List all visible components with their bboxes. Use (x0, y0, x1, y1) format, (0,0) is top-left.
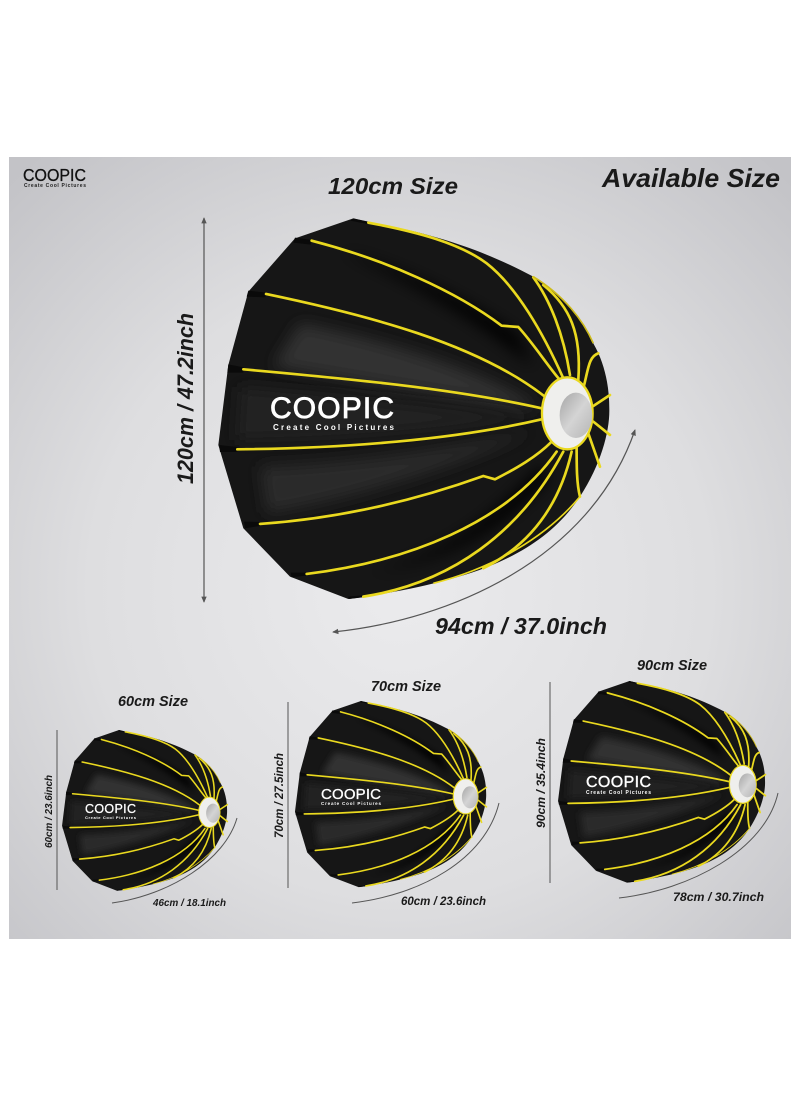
dimension: 60cm depth arrow (112, 818, 237, 903)
softbox: 60cm: Create Cool Pictures (85, 815, 137, 820)
dimension label: 70cm depth: 60cm / 23.6inch (401, 896, 486, 908)
softbox: 70cm: COOPIC (321, 786, 381, 803)
dimension: 120cm depth arrow (333, 430, 635, 632)
softbox: 70cm: Create Cool Pictures (321, 801, 381, 806)
heading: 60cm size: 60cm Size (118, 694, 188, 710)
dimension: 120cm height arrow (203, 218, 205, 602)
dimension label: 120cm depth: 94cm / 37.0inch (435, 613, 607, 639)
dimension: 90cm depth arrow (619, 793, 778, 898)
dimension label: 60cm height: 60cm / 23.6inch (44, 775, 55, 848)
softbox: 70cm (295, 701, 486, 887)
panel: background (9, 157, 791, 939)
dimension: 70cm depth arrow (352, 803, 499, 903)
softbox: 60cm (62, 730, 227, 891)
dimension label: 90cm depth: 78cm / 30.7inch (673, 890, 764, 904)
heading: 90cm size: 90cm Size (637, 658, 707, 674)
heading: available size: Available Size (601, 163, 780, 193)
softbox: 120cm: Create Cool Pictures (273, 423, 395, 432)
softbox: 120cm: COOPIC (270, 392, 394, 425)
dimension label: 120cm height: 120cm / 47.2inch (173, 313, 198, 484)
softbox: 90cm: COOPIC (586, 774, 651, 791)
dimension: 60cm height arrow (56, 730, 58, 890)
brand logo: Create Cool Pictures (24, 183, 86, 189)
dimension label: 70cm height: 70cm / 27.5inch (274, 753, 286, 838)
dimension: 70cm height arrow (287, 702, 289, 888)
heading: 120cm size: 120cm Size (328, 173, 458, 199)
brand logo: COOPIC (23, 165, 86, 185)
softbox: 60cm: COOPIC (85, 802, 136, 816)
softbox: 90cm (558, 681, 765, 883)
dimension label: 60cm depth: 46cm / 18.1inch (152, 898, 226, 909)
dimension: 90cm height arrow (549, 682, 551, 883)
softbox: 90cm: Create Cool Pictures (586, 790, 651, 796)
softbox: 120cm (218, 218, 610, 599)
heading: 70cm size: 70cm Size (371, 679, 441, 695)
dimension label: 90cm height: 90cm / 35.4inch (534, 738, 548, 828)
